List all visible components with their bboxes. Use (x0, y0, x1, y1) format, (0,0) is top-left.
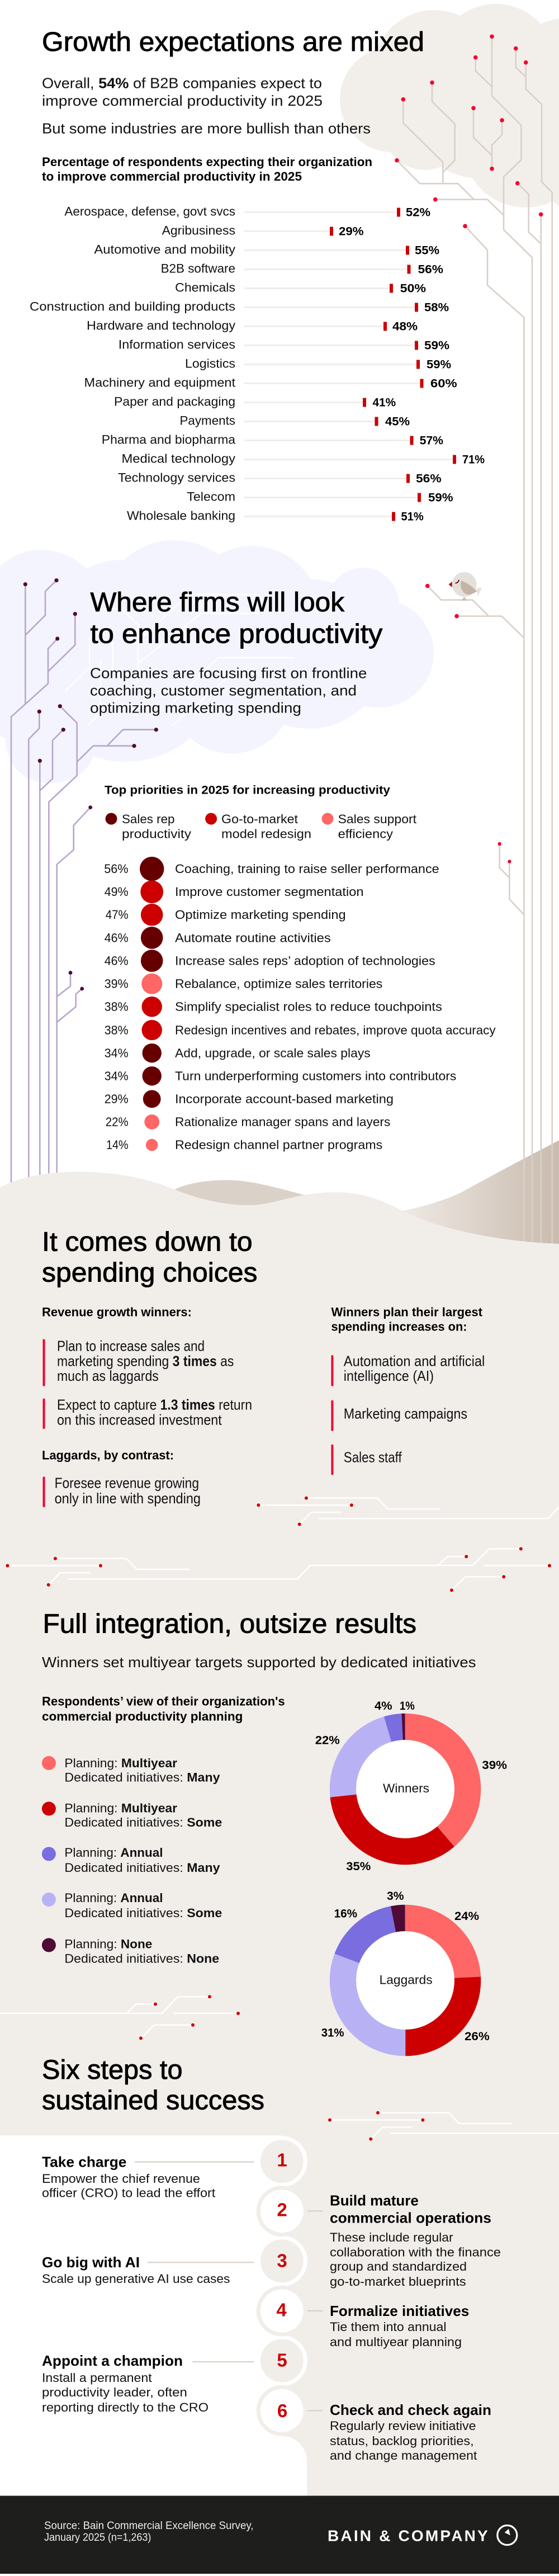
chart: industries lollipop: Pharma and biopharma (102, 433, 236, 446)
legend: planning types: Planning: Annual (64, 1846, 163, 1860)
chart: industries lollipop: 51% (401, 510, 424, 523)
footer (0, 2495, 559, 2574)
section two intro: Companies are focusing first on frontline (90, 665, 367, 682)
chart: industries lollipop: B2B software (161, 262, 235, 275)
chart: industries lollipop: 59% (424, 339, 449, 352)
decorative cloud: section two (0, 540, 434, 783)
chart: industries lollipop: 56% (416, 472, 442, 485)
step 3: Scale up generative AI use cases (42, 2272, 230, 2286)
decorative cloud: top right (340, 4, 559, 215)
chart: industries lollipop: 59% (428, 491, 453, 504)
step 6: and change management (330, 2448, 477, 2462)
chart: priorities bubble list: 34% (105, 1069, 129, 1083)
chart: industries lollipop: Hardware and technology (87, 319, 235, 332)
step 2: go-to-market blueprints (330, 2275, 466, 2289)
tree circuit: top right, beige branches (395, 35, 552, 1253)
heading: six steps (42, 2055, 264, 2115)
step 2: commercial operations (330, 2210, 491, 2226)
panel: laggards (42, 1449, 201, 1507)
back hills (174, 1140, 559, 1264)
chart: winners donut: 4% (375, 1700, 392, 1712)
source note (44, 2520, 254, 2544)
chart: industries lollipop: 29% (339, 225, 364, 238)
chart: industries lollipop: 71% (462, 453, 485, 466)
chart: industries lollipop: Telecom (187, 490, 235, 503)
chart: priorities bubble list: 49% (105, 885, 129, 899)
panel: white step column (0, 2135, 307, 2495)
chart: winners donut: 1% (400, 1700, 415, 1712)
legend: priorities: Go-to-market (221, 812, 298, 826)
step 3: Go big with AI (42, 2254, 140, 2271)
chart: industries lollipop: Information services (119, 338, 235, 351)
chart: priorities bubble list: 38% (105, 1000, 129, 1013)
chart: priorities bubble list: Optimize marketing spending (175, 908, 346, 922)
panel: largest spending increases (331, 1305, 485, 1475)
chart: priorities bubble list: Simplify specialist roles to reduce touchpoints (175, 1000, 442, 1013)
step 2: These include regular (330, 2230, 453, 2244)
section two intro: optimizing marketing spending (90, 699, 301, 716)
panel: largest spending increases: Winners plan their largest (331, 1305, 483, 1319)
chart: industries lollipop: 41% (372, 396, 396, 409)
step 5 (42, 2339, 304, 2414)
chart: priorities bubble list: Incorporate account-based marketing (175, 1092, 394, 1106)
step 2 (260, 2190, 501, 2289)
legend: priorities: Sales support (338, 812, 416, 826)
step 6: 6 (277, 2400, 287, 2421)
chart: industries lollipop: 50% (400, 282, 426, 295)
panel: revenue growth winners: Revenue growth winners: (42, 1305, 192, 1319)
legend: priorities (105, 812, 416, 841)
step 1 (42, 2140, 304, 2200)
chart: priorities bubble list: Rationalize manager spans and layers (175, 1115, 390, 1129)
step 3: 3 (277, 2250, 287, 2271)
chart: priorities bubble list: 22% (106, 1115, 129, 1129)
chart title: planning view (42, 1695, 285, 1724)
step 4: Formalize initiatives (330, 2303, 469, 2319)
intro text (42, 75, 371, 136)
panel: revenue growth winners: on this increased investment (57, 1411, 222, 1428)
step 4: and multiyear planning (330, 2335, 462, 2349)
chart title: to improve commercial productivity in 2025 (42, 169, 302, 183)
chart: priorities bubble list: Rebalance, optimize sales territories (175, 976, 382, 991)
chart: industries lollipop: 45% (385, 415, 410, 428)
chart title: planning view: Respondents’ view of their organization's (42, 1695, 285, 1709)
decorative white circuits, mid page (6, 1497, 559, 1592)
chart: industries lollipop: 57% (420, 434, 443, 447)
legend: planning types: Dedicated initiatives: None (64, 1952, 219, 1965)
chart: industries lollipop: Aerospace, defense, govt svcs (64, 205, 235, 218)
step 5: productivity leader, often (42, 2385, 187, 2399)
chart: industries lollipop: Wholesale banking (127, 509, 235, 522)
decorative white circuit inside cloud (65, 595, 293, 725)
chart: industries lollipop: Machinery and equipment (84, 376, 235, 389)
chart: priorities bubble list: Add, upgrade, or scale sales plays (175, 1046, 371, 1060)
legend: priorities: productivity (122, 827, 191, 841)
chart: priorities bubble list: 14% (106, 1138, 129, 1152)
legend: priorities: model redesign (221, 827, 311, 841)
panel: laggards: only in line with spending (55, 1490, 201, 1507)
panel: revenue growth winners (42, 1305, 252, 1429)
chart: priorities bubble list: Redesign channel partner programs (175, 1138, 382, 1152)
chart: industries lollipop (30, 205, 485, 523)
panel: revenue growth winners: Plan to increase sales and (57, 1337, 205, 1354)
step 5: Appoint a champion (42, 2352, 183, 2369)
chart: industries lollipop: Construction and building products (30, 300, 235, 313)
chart: laggards donut: 3% (387, 1890, 404, 1903)
panel: largest spending increases: Automation and artificial (344, 1352, 485, 1369)
panel: revenue growth winners: much as laggards (57, 1367, 159, 1384)
legend: planning types: Planning: Multiyear (64, 1801, 177, 1815)
panel: largest spending increases: intelligence (AI) (344, 1367, 434, 1384)
step 5: Install a permanent (42, 2371, 152, 2385)
step 1: Empower the chief revenue (42, 2172, 200, 2186)
chart title: priorities: Top priorities in 2025 for increasing productivity (105, 784, 390, 796)
source note: Source: Bain Commercial Excellence Survey, (44, 2520, 254, 2532)
chart: laggards donut: Laggards (380, 1973, 433, 1987)
step 1: officer (CRO) to lead the effort (42, 2186, 215, 2200)
legend: planning types: Planning: Annual (64, 1891, 163, 1905)
chart: priorities bubble list: Redesign incentives and rebates, improve quota accuracy (175, 1023, 495, 1037)
step 4: Tie them into annual (330, 2320, 446, 2334)
chart: priorities bubble list (104, 857, 495, 1152)
chart: industries lollipop: Logistics (185, 357, 235, 370)
chart: laggards donut: 24% (454, 1910, 479, 1923)
decorative white circuits, lower page (0, 1995, 559, 2141)
chart: laggards donut (321, 1890, 490, 2043)
legend: planning types (42, 1756, 222, 1965)
chart: priorities bubble list: 39% (105, 976, 129, 991)
chart: industries lollipop: Technology services (118, 471, 235, 484)
chart: industries lollipop: 55% (415, 244, 439, 257)
panel: laggards: Laggards, by contrast: (42, 1449, 174, 1462)
step 3 (42, 2239, 304, 2286)
legend: planning types: Planning: None (64, 1937, 152, 1951)
heading: spending choices (42, 1228, 258, 1287)
legend: priorities: Sales rep (122, 812, 174, 826)
chart: industries lollipop: Automotive and mobility (94, 243, 235, 256)
chart: industries lollipop: 60% (430, 377, 457, 390)
intro text: Overall, 54% of B2B companies expect to (42, 75, 322, 92)
chart: winners donut: 39% (482, 1759, 507, 1772)
chart: industries lollipop: 56% (418, 263, 443, 276)
chart: priorities bubble list: 56% (104, 862, 129, 876)
panel: revenue growth winners: Expect to capture 1.3 times return (57, 1396, 252, 1413)
chart: priorities bubble list: 34% (105, 1046, 129, 1060)
front hill and beige background (0, 1172, 559, 2500)
tree circuit: left, purple branches (11, 578, 158, 1197)
legend: priorities: efficiency (338, 827, 393, 841)
step 6 (260, 2389, 491, 2462)
legend: planning types: Dedicated initiatives: Many (64, 1861, 220, 1875)
logo: Bain & Company: BAIN & COMPANY (328, 2527, 488, 2544)
step 4: 4 (276, 2300, 287, 2320)
icon: bird on a branch (449, 572, 482, 601)
chart: priorities bubble list: 46% (105, 931, 129, 945)
chart: priorities bubble list: 46% (105, 954, 129, 968)
heading: full integration: Full integration, outsize results (42, 1609, 416, 1639)
chart: winners donut: 35% (346, 1860, 371, 1873)
subheading: multiyear targets: Winners set multiyear targets supported by dedicated initiatives (42, 1654, 476, 1671)
heading: spending choices: spending choices (42, 1258, 258, 1287)
step 2: 2 (277, 2200, 287, 2220)
step 4 (260, 2290, 469, 2349)
step 1: 1 (277, 2149, 287, 2170)
step 2: collaboration with the finance (330, 2245, 501, 2259)
chart: priorities bubble list: Turn underperforming customers into contributors (175, 1069, 456, 1083)
heading: where firms will look (91, 588, 382, 649)
chart: winners donut: 22% (315, 1734, 340, 1747)
chart: priorities bubble list: Automate routine activities (175, 931, 331, 945)
heading: six steps: sustained success (42, 2086, 264, 2115)
chart: priorities bubble list: Improve customer segmentation (175, 885, 363, 899)
legend: planning types: Dedicated initiatives: Some (64, 1815, 222, 1829)
chart title: planning view: commercial productivity planning (42, 1710, 243, 1724)
legend: planning types: Planning: Multiyear (64, 1756, 177, 1770)
source note: January 2025 (n=1,263) (44, 2532, 151, 2544)
legend: planning types: Dedicated initiatives: Many (64, 1771, 220, 1785)
heading: six steps: Six steps to (42, 2055, 182, 2085)
chart: industries lollipop: 52% (406, 206, 430, 219)
section two intro (90, 665, 367, 716)
chart: industries lollipop: Agribusiness (162, 224, 235, 237)
step 5: reporting directly to the CRO (42, 2400, 209, 2414)
chart: industries lollipop: 59% (427, 358, 451, 371)
step 1: Take charge (42, 2154, 126, 2171)
step 6: status, backlog priorities, (330, 2434, 474, 2448)
chart: industries lollipop: 58% (424, 301, 449, 314)
chart: industries lollipop: Medical technology (122, 452, 235, 465)
chart: priorities bubble list: 47% (106, 908, 129, 922)
heading: where firms will look: to enhance productivity (91, 619, 382, 649)
heading: where firms will look: Where firms will look (91, 588, 345, 617)
panel: laggards: Foresee revenue growing (55, 1475, 199, 1492)
panel: largest spending increases: Marketing campaigns (344, 1405, 467, 1422)
chart: priorities bubble list: 29% (105, 1092, 129, 1106)
intro text: But some industries are more bullish than others (42, 120, 371, 136)
chart: priorities bubble list: Coaching, training to raise seller performance (175, 862, 439, 876)
chart: priorities bubble list: Increase sales reps’ adoption of technologies (175, 954, 435, 968)
small branches beside bird (425, 584, 524, 915)
chart: winners donut: Winners (383, 1781, 429, 1795)
heading: growth expectations: Growth expectations are mixed (42, 27, 424, 57)
chart: winners donut (315, 1700, 507, 1873)
chart: laggards donut: 16% (334, 1907, 357, 1921)
chart title (42, 155, 372, 183)
chart: laggards donut: 26% (465, 2030, 490, 2043)
step 5: 5 (277, 2350, 287, 2371)
panel: revenue growth winners: marketing spending 3 times as (57, 1352, 234, 1369)
section two intro: coaching, customer segmentation, and (90, 682, 357, 699)
panel: largest spending increases: spending increases on: (331, 1320, 467, 1334)
step 2: group and standardized (330, 2259, 467, 2273)
heading: spending choices: It comes down to (42, 1228, 253, 1257)
step 2: Build mature (330, 2192, 419, 2209)
chart: priorities bubble list: 38% (105, 1023, 129, 1037)
chart: industries lollipop: Chemicals (175, 281, 235, 294)
chart title: Percentage of respondents expecting their organization (42, 155, 372, 169)
chart: industries lollipop: Payments (180, 414, 235, 427)
legend: planning types: Dedicated initiatives: Some (64, 1906, 222, 1920)
step 6: Regularly review initiative (330, 2419, 476, 2433)
chart: industries lollipop: Paper and packaging (114, 395, 235, 408)
intro text: improve commercial productivity in 2025 (42, 92, 323, 109)
chart: industries lollipop: 48% (392, 320, 418, 333)
panel: largest spending increases: Sales staff (344, 1449, 402, 1465)
step 6: Check and check again (330, 2402, 491, 2418)
chart: laggards donut: 31% (321, 2027, 344, 2039)
